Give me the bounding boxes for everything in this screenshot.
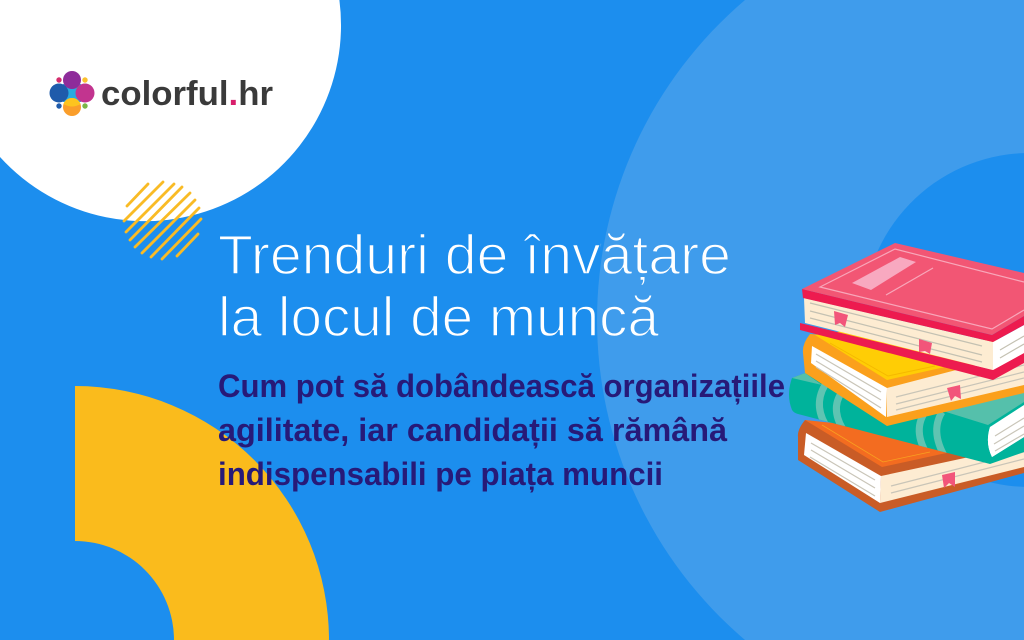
large light blue circle (597, 0, 1024, 640)
subtitle (218, 368, 785, 492)
cover border (820, 249, 1024, 329)
green book (789, 373, 1024, 464)
bookmarks (834, 311, 848, 327)
subtitle: agilitate, iar candidații să rămână (218, 412, 727, 448)
spine stripes (819, 385, 948, 462)
title: Trenduri de învățare (218, 223, 731, 286)
subtitle: Cum pot să dobândească organizațiile (218, 368, 785, 404)
bookmark (947, 385, 961, 401)
title: la locul de muncă (218, 285, 660, 348)
inner blue circle (863, 153, 1024, 487)
yellow-orange book (803, 330, 1024, 426)
icon: logo circles (50, 71, 94, 116)
white logo circle (0, 0, 341, 221)
logo (50, 71, 273, 116)
subtitle: indispensabili pe piața muncii (218, 456, 663, 492)
hatched circle (124, 182, 201, 259)
bookmark (942, 472, 955, 488)
logo wordmark: colorful.hr (101, 75, 273, 113)
illustration: stack of books (789, 243, 1024, 512)
top red book (800, 243, 1024, 380)
yellow arc (75, 386, 329, 640)
cover label (852, 257, 916, 290)
bottom orange book (798, 420, 1024, 512)
title (218, 223, 731, 348)
